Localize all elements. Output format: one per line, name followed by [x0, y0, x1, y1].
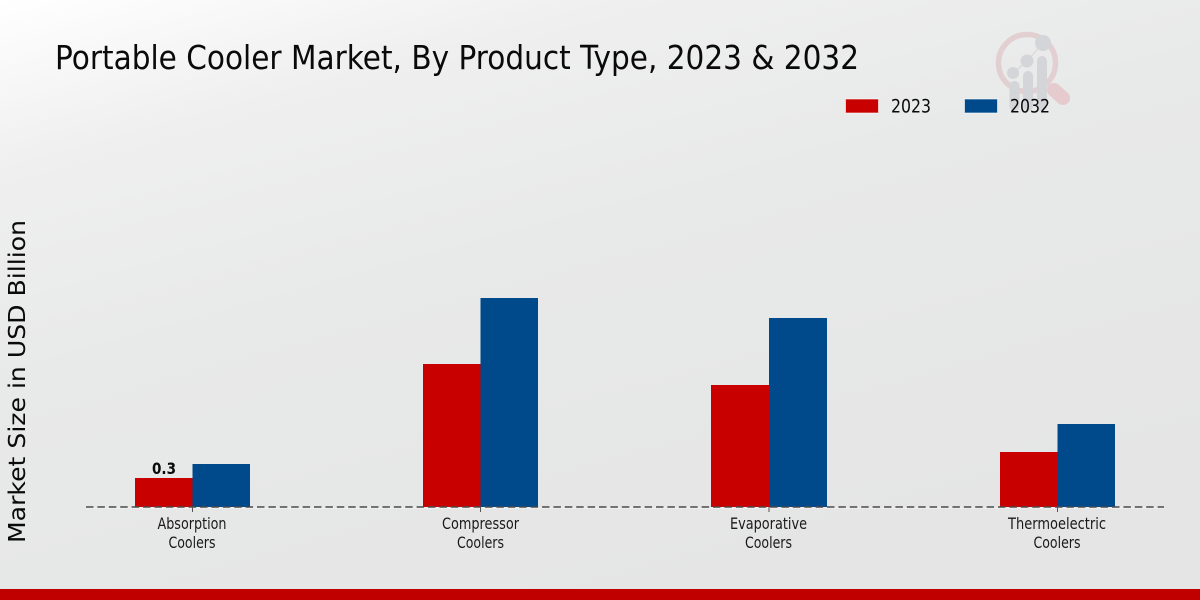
bars: Thermoelectric Coolers [1000, 424, 1115, 507]
category label: Absorption Coolers [158, 514, 226, 552]
category label: Compressor Coolers: Coolers [457, 533, 504, 552]
category label: Thermoelectric Coolers: Thermoelectric [1007, 514, 1106, 533]
legend [846, 96, 1050, 118]
category label: Absorption Coolers: Coolers [168, 533, 216, 552]
x-axis baseline [86, 507, 1164, 512]
legend item: 2023 [846, 96, 931, 118]
bars: Absorption Coolers [135, 464, 250, 507]
category label: Evaporative Coolers [730, 514, 807, 552]
category label: Compressor Coolers: Compressor [442, 514, 519, 533]
y-axis label: Market Size in USD Billion [5, 220, 31, 543]
category label: Evaporative Coolers: Evaporative [730, 514, 807, 533]
data label: 0.3 [152, 459, 176, 478]
bars: Evaporative Coolers [711, 318, 827, 507]
bar chart [86, 298, 1164, 552]
legend item: 2023: 2023 [891, 96, 931, 118]
watermark logo [998, 34, 1063, 111]
category label: Absorption Coolers: Absorption [158, 514, 226, 533]
category label: Evaporative Coolers: Coolers [745, 533, 792, 552]
title: Portable Cooler Market, By Product Type, 2023 & 2032 [55, 38, 859, 77]
legend item: 2032 [964, 96, 1050, 118]
category label: Compressor Coolers [442, 514, 519, 552]
legend item: 2032: 2032 [1010, 96, 1050, 118]
bottom red band [0, 589, 1200, 600]
bars: Compressor Coolers [423, 298, 538, 507]
category label: Thermoelectric Coolers: Coolers [1034, 533, 1080, 552]
category label: Thermoelectric Coolers [1007, 514, 1106, 552]
